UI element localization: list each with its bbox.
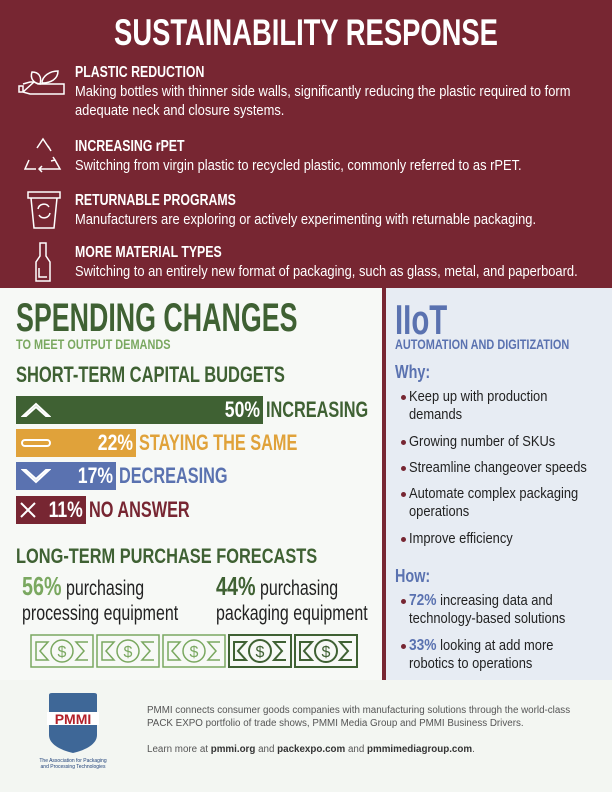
list: how: 72% increasing data and: [409, 592, 553, 609]
logo: PMMI: and Processing Technologies: [41, 764, 105, 770]
label: INCREASING: [266, 397, 368, 422]
list: why: [401, 388, 587, 547]
label: DECREASING: [119, 463, 228, 488]
bar: increasing: 50%: [225, 397, 260, 422]
stat: 56%: 56% purchasing: [22, 571, 144, 601]
bar: increasing: [16, 396, 263, 424]
footer text: [147, 705, 570, 755]
list: why: Streamline changeover speeds: [409, 459, 587, 476]
subheading: TO MEET OUTPUT DEMANDS: [16, 336, 171, 352]
icons: dollar bills: $: [190, 644, 199, 661]
list: how: [401, 592, 565, 672]
item: returnable programs: Manufacturers are exploring or actively experimenting with returnable packaging.: [75, 211, 536, 228]
bar: decreasing: [16, 462, 116, 490]
stat: 56%: [22, 571, 178, 625]
item: plastic reduction: [75, 64, 570, 119]
item: increasing rPET: Switching from virgin plastic to recycled plastic, commonly referred to as rPET.: [75, 157, 522, 174]
subheading: AUTOMATION AND DIGITIZATION: [395, 336, 569, 352]
item: returnable programs: RETURNABLE PROGRAMS: [75, 192, 236, 209]
item: increasing rPET: INCREASING rPET: [75, 138, 185, 155]
item: increasing rPET: [75, 138, 522, 174]
item: plastic reduction: PLASTIC REDUCTION: [75, 64, 204, 81]
list: why: operations: [409, 503, 469, 520]
title: SUSTAINABILITY RESPONSE: [114, 12, 498, 53]
panel: sustainability response: [0, 0, 612, 288]
item: plastic reduction: adequate neck and closure systems.: [75, 102, 284, 119]
bar: no answer: [16, 496, 86, 524]
list: why: Automate complex packaging: [409, 485, 578, 502]
heading: long-term: LONG-TERM PURCHASE FORECASTS: [16, 545, 317, 568]
list: how: robotics to operations: [409, 655, 532, 672]
footer text: Learn more at pmmi.org and packexpo.com and pmmimediagroup.com.: [147, 744, 475, 755]
list: why: demands: [409, 406, 462, 423]
icons: dollar bills: [30, 634, 358, 668]
stat: 56%: processing equipment: [22, 602, 178, 625]
heading: how: How:: [395, 566, 430, 586]
item: more material types: Switching to an entirely new format of packaging, such as glass, metal, and paperboard.: [75, 263, 578, 280]
logo: PMMI: The Association for Packaging: [39, 758, 107, 764]
item: plastic reduction: Making bottles with thinner side walls, significantly reducing the plastic required to form: [75, 83, 570, 100]
icons: dollar bills: $: [124, 644, 133, 661]
icons: dollar bills: $: [322, 644, 331, 661]
list: how: technology-based solutions: [409, 610, 565, 627]
logo: PMMI: PMMI: [55, 711, 91, 727]
stat: 44%: [216, 571, 368, 625]
list: how: 33% looking at add more: [409, 637, 553, 654]
heading: short-term: SHORT-TERM CAPITAL BUDGETS: [16, 362, 285, 387]
bar: no answer: 11%: [49, 497, 83, 522]
item: more material types: [75, 244, 578, 280]
stat: 44%: packaging equipment: [216, 602, 368, 625]
list: why: Growing number of SKUs: [409, 433, 555, 450]
icon: plant bottle: [18, 70, 65, 95]
bar: decreasing: 17%: [78, 463, 113, 488]
item: returnable programs: [75, 192, 536, 228]
footer text: PACK EXPO portfolio of trade shows, PMMI Media Group and PMMI Business Drivers.: [147, 718, 524, 729]
label: NO ANSWER: [89, 497, 190, 522]
icon: returnable bin: [27, 191, 61, 229]
icon: recycle: [24, 138, 62, 172]
icon: glass bottle: [35, 242, 51, 282]
label: STAYING THE SAME: [139, 430, 297, 455]
icons: dollar bills: $: [256, 644, 265, 661]
bar: same: [16, 429, 136, 457]
footer text: PMMI connects consumer goods companies with manufacturing solutions through the world-class: [147, 705, 570, 716]
item: more material types: MORE MATERIAL TYPES: [75, 244, 222, 261]
list: why: Improve efficiency: [409, 530, 513, 547]
stat: 44%: 44% purchasing: [216, 571, 338, 601]
bar: same: 22%: [98, 430, 133, 455]
heading: why: Why:: [395, 362, 430, 382]
logo: PMMI: [39, 693, 107, 770]
heading: SPENDING CHANGES: [16, 296, 297, 340]
panel: spending changes: [0, 288, 382, 680]
panel: IIoT: [386, 288, 612, 680]
icons: dollar bills: $: [58, 644, 67, 661]
list: why: Keep up with production: [409, 388, 547, 405]
heading: IIoT: [395, 296, 447, 343]
